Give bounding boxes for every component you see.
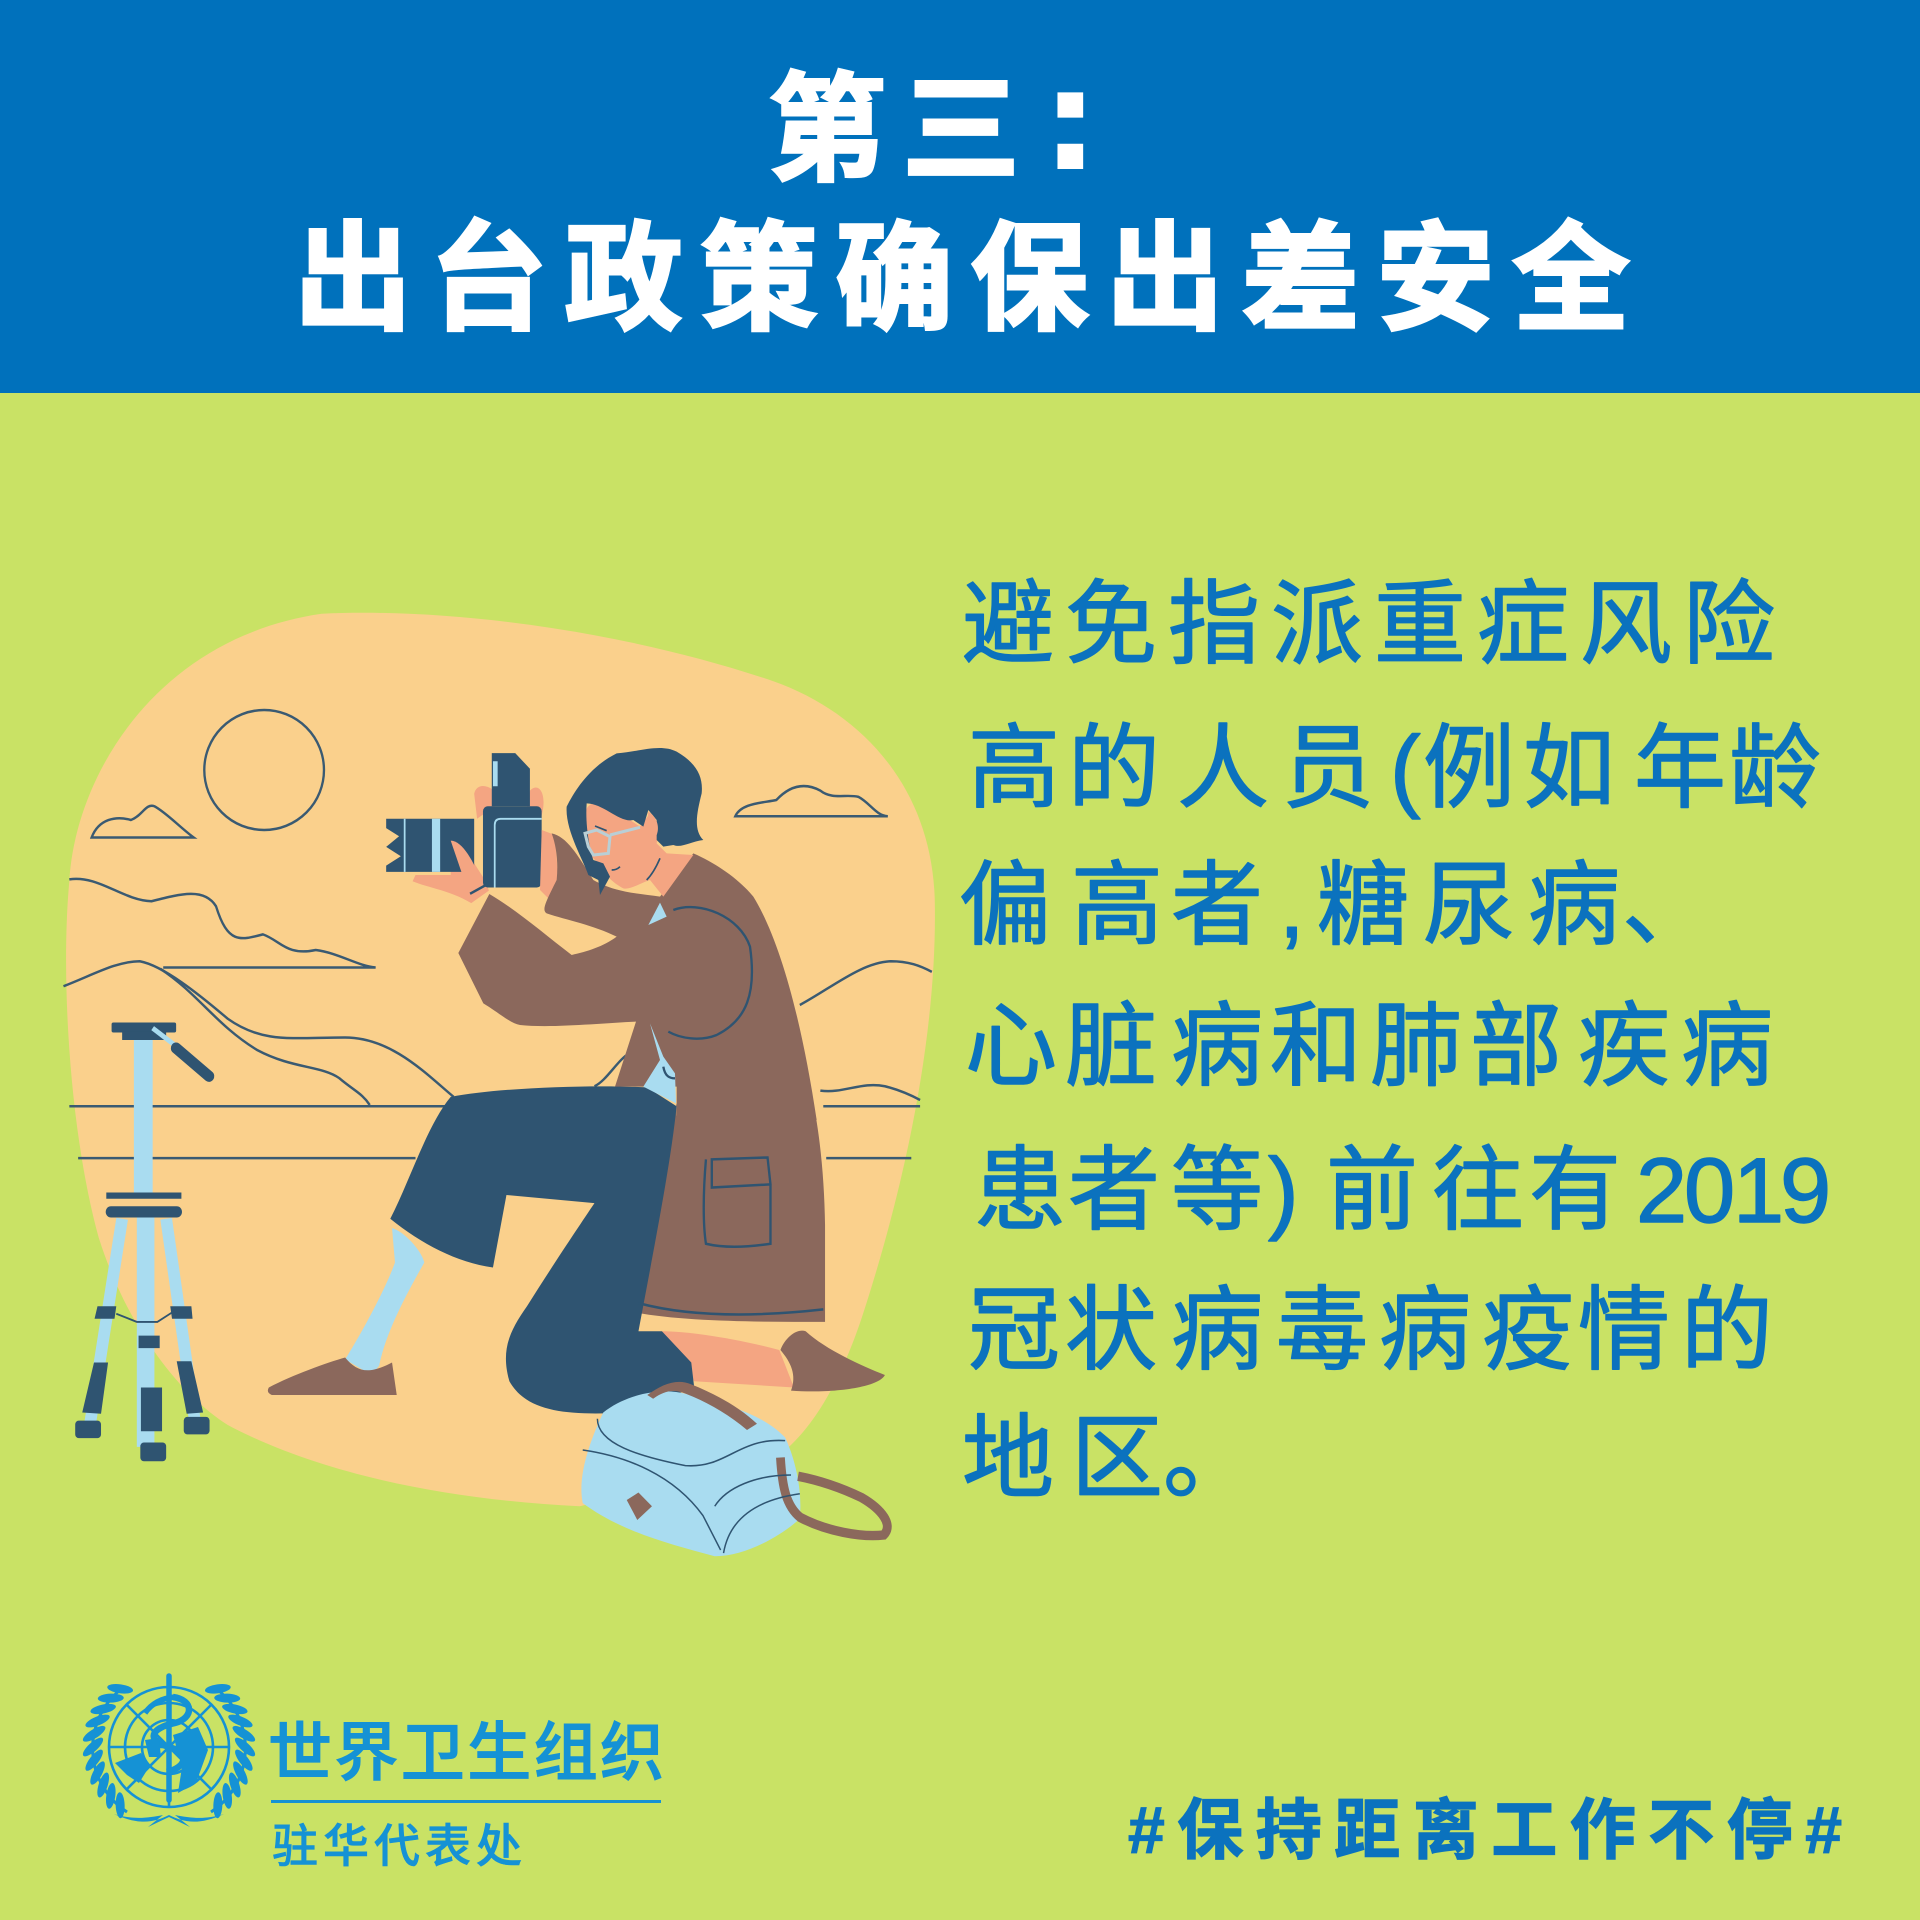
body line 4: 心脏病和肺部疾病 xyxy=(965,996,1773,1098)
coat pocket and hem xyxy=(638,1158,823,1314)
lower coat xyxy=(636,1103,825,1322)
camera xyxy=(386,753,542,894)
face and neck xyxy=(585,802,693,897)
continents xyxy=(115,1727,208,1793)
front shoe xyxy=(268,1358,397,1395)
trousers xyxy=(390,1086,694,1413)
landscape line art xyxy=(63,710,932,1158)
body line 5: 患者等)前往有2019 xyxy=(974,1140,1831,1242)
background blob xyxy=(66,613,935,1506)
body line 2: 高的人员(例如年龄 xyxy=(968,718,1821,820)
body line 3: 偏高者,糖尿病、 xyxy=(959,855,1714,957)
office name: 驻华代表处 xyxy=(272,1820,522,1872)
prosthetic leg xyxy=(345,1228,424,1375)
hashtag: #保持距离工作不停# xyxy=(1128,1793,1842,1867)
organisation name: 世界卫生组织 xyxy=(268,1717,664,1789)
coat upper xyxy=(458,833,817,1120)
shirt xyxy=(643,903,676,1103)
rear shin xyxy=(662,1331,794,1388)
title line 2: 出台政策确保出差安全 xyxy=(294,214,1630,346)
ear xyxy=(647,812,658,837)
person upper body xyxy=(458,748,817,1120)
body text xyxy=(959,574,1831,1510)
hair xyxy=(567,748,703,895)
body line 6: 冠状病毒病疫情的 xyxy=(968,1280,1773,1382)
body line 1: 避免指派重症风险 xyxy=(962,574,1775,676)
logo divider xyxy=(271,1800,661,1803)
rear shoe xyxy=(780,1331,885,1391)
tripod xyxy=(75,1022,210,1461)
WHO emblem xyxy=(80,1676,258,1827)
illustration: photographer scene xyxy=(63,613,935,1556)
camera bag xyxy=(581,1382,887,1556)
facial lines xyxy=(595,826,660,880)
header banner xyxy=(0,0,1920,393)
coat seams xyxy=(663,907,752,1078)
title line 1: 第三 xyxy=(768,65,1020,197)
glasses xyxy=(585,827,640,855)
laurel wreath xyxy=(80,1683,258,1827)
globe and staff xyxy=(109,1676,229,1807)
title line 1 xyxy=(768,39,1094,197)
forearm skin xyxy=(540,830,558,900)
title line 1: : xyxy=(1047,39,1094,196)
body line 7: 地区。 xyxy=(962,1408,1255,1510)
hands xyxy=(413,786,544,903)
